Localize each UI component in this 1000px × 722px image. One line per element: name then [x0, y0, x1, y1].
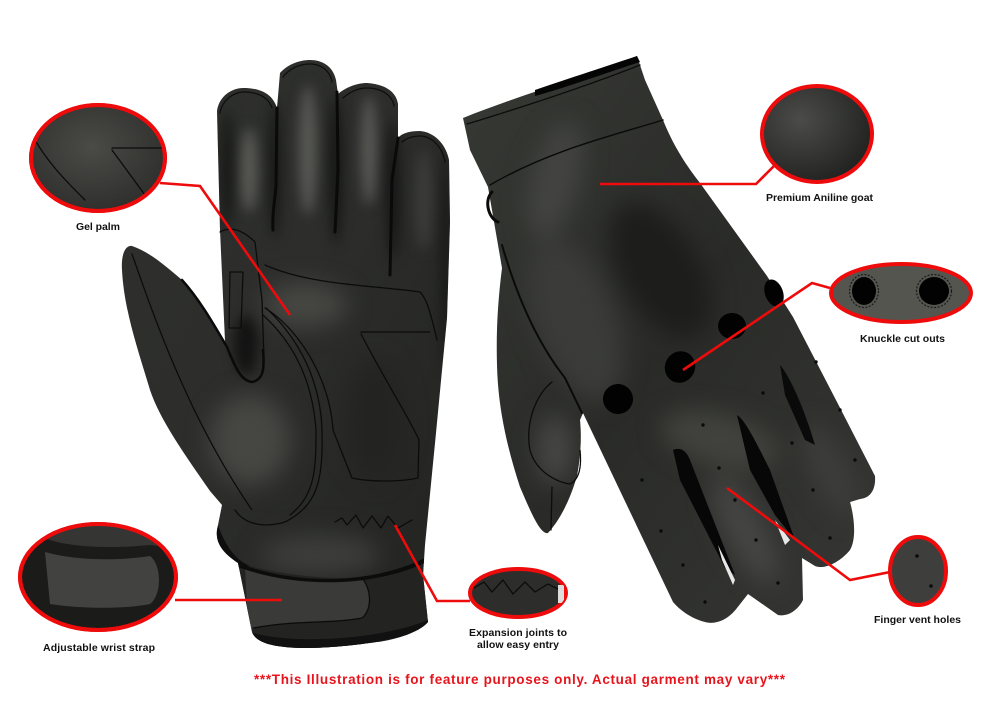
side strap: [488, 192, 498, 222]
label: knuckle cut outs: Knuckle cut outs: [860, 333, 945, 345]
palm and thumb light: [210, 283, 403, 575]
thumb crotch edge: [182, 280, 264, 382]
callout: premium aniline goat: [762, 86, 872, 182]
label: expansion joints: allow easy entry: [477, 639, 559, 651]
callout line: premium aniline goat: [600, 165, 775, 184]
index finger side panel: [220, 229, 264, 360]
label: expansion joints: [469, 627, 567, 651]
cuff seam: [467, 65, 640, 124]
callout line: wrist strap: [175, 599, 282, 601]
thumb panel: [529, 382, 581, 484]
finger slits: [673, 449, 735, 575]
knuckle cut outs: [598, 277, 787, 419]
wrist strap base: [238, 563, 428, 648]
cuff line: [490, 120, 663, 185]
callout line: finger vent holes: [727, 488, 890, 580]
label: finger vent holes: Finger vent holes: [874, 614, 961, 626]
glove: back side: [463, 56, 875, 623]
callout: gel palm: [31, 105, 167, 211]
label: adjustable wrist strap: Adjustable wrist strap: [43, 642, 155, 654]
disclaimer: ***This Illustration is for feature purposes only. Actual garment may vary***: [254, 672, 786, 687]
expansion joints: [335, 515, 412, 528]
callout: knuckle cut outs: [831, 264, 971, 322]
label: gel palm: Gel palm: [76, 221, 120, 233]
callout: expansion joints: [470, 569, 566, 617]
finger gaps: [273, 108, 277, 230]
palm seams: [265, 265, 437, 340]
callout: adjustable wrist strap: [15, 520, 180, 630]
label: expansion joints: Expansion joints to: [469, 627, 567, 639]
finger stitching: [220, 64, 445, 162]
leather shading: [527, 128, 864, 580]
label: premium aniline goat: Premium Aniline goat: [766, 192, 874, 204]
callout line: expansion joints: [395, 525, 470, 601]
glove: palm side: [122, 60, 450, 649]
top opening: [535, 56, 640, 96]
vent holes: [640, 360, 857, 604]
callout line: gel palm: [160, 183, 290, 315]
callout line: knuckle cut outs: [683, 283, 830, 370]
callout: finger vent holes: [890, 537, 946, 605]
finger highlights: [240, 85, 433, 250]
finger dark shading: [222, 95, 450, 375]
velcro patch: [245, 566, 370, 628]
